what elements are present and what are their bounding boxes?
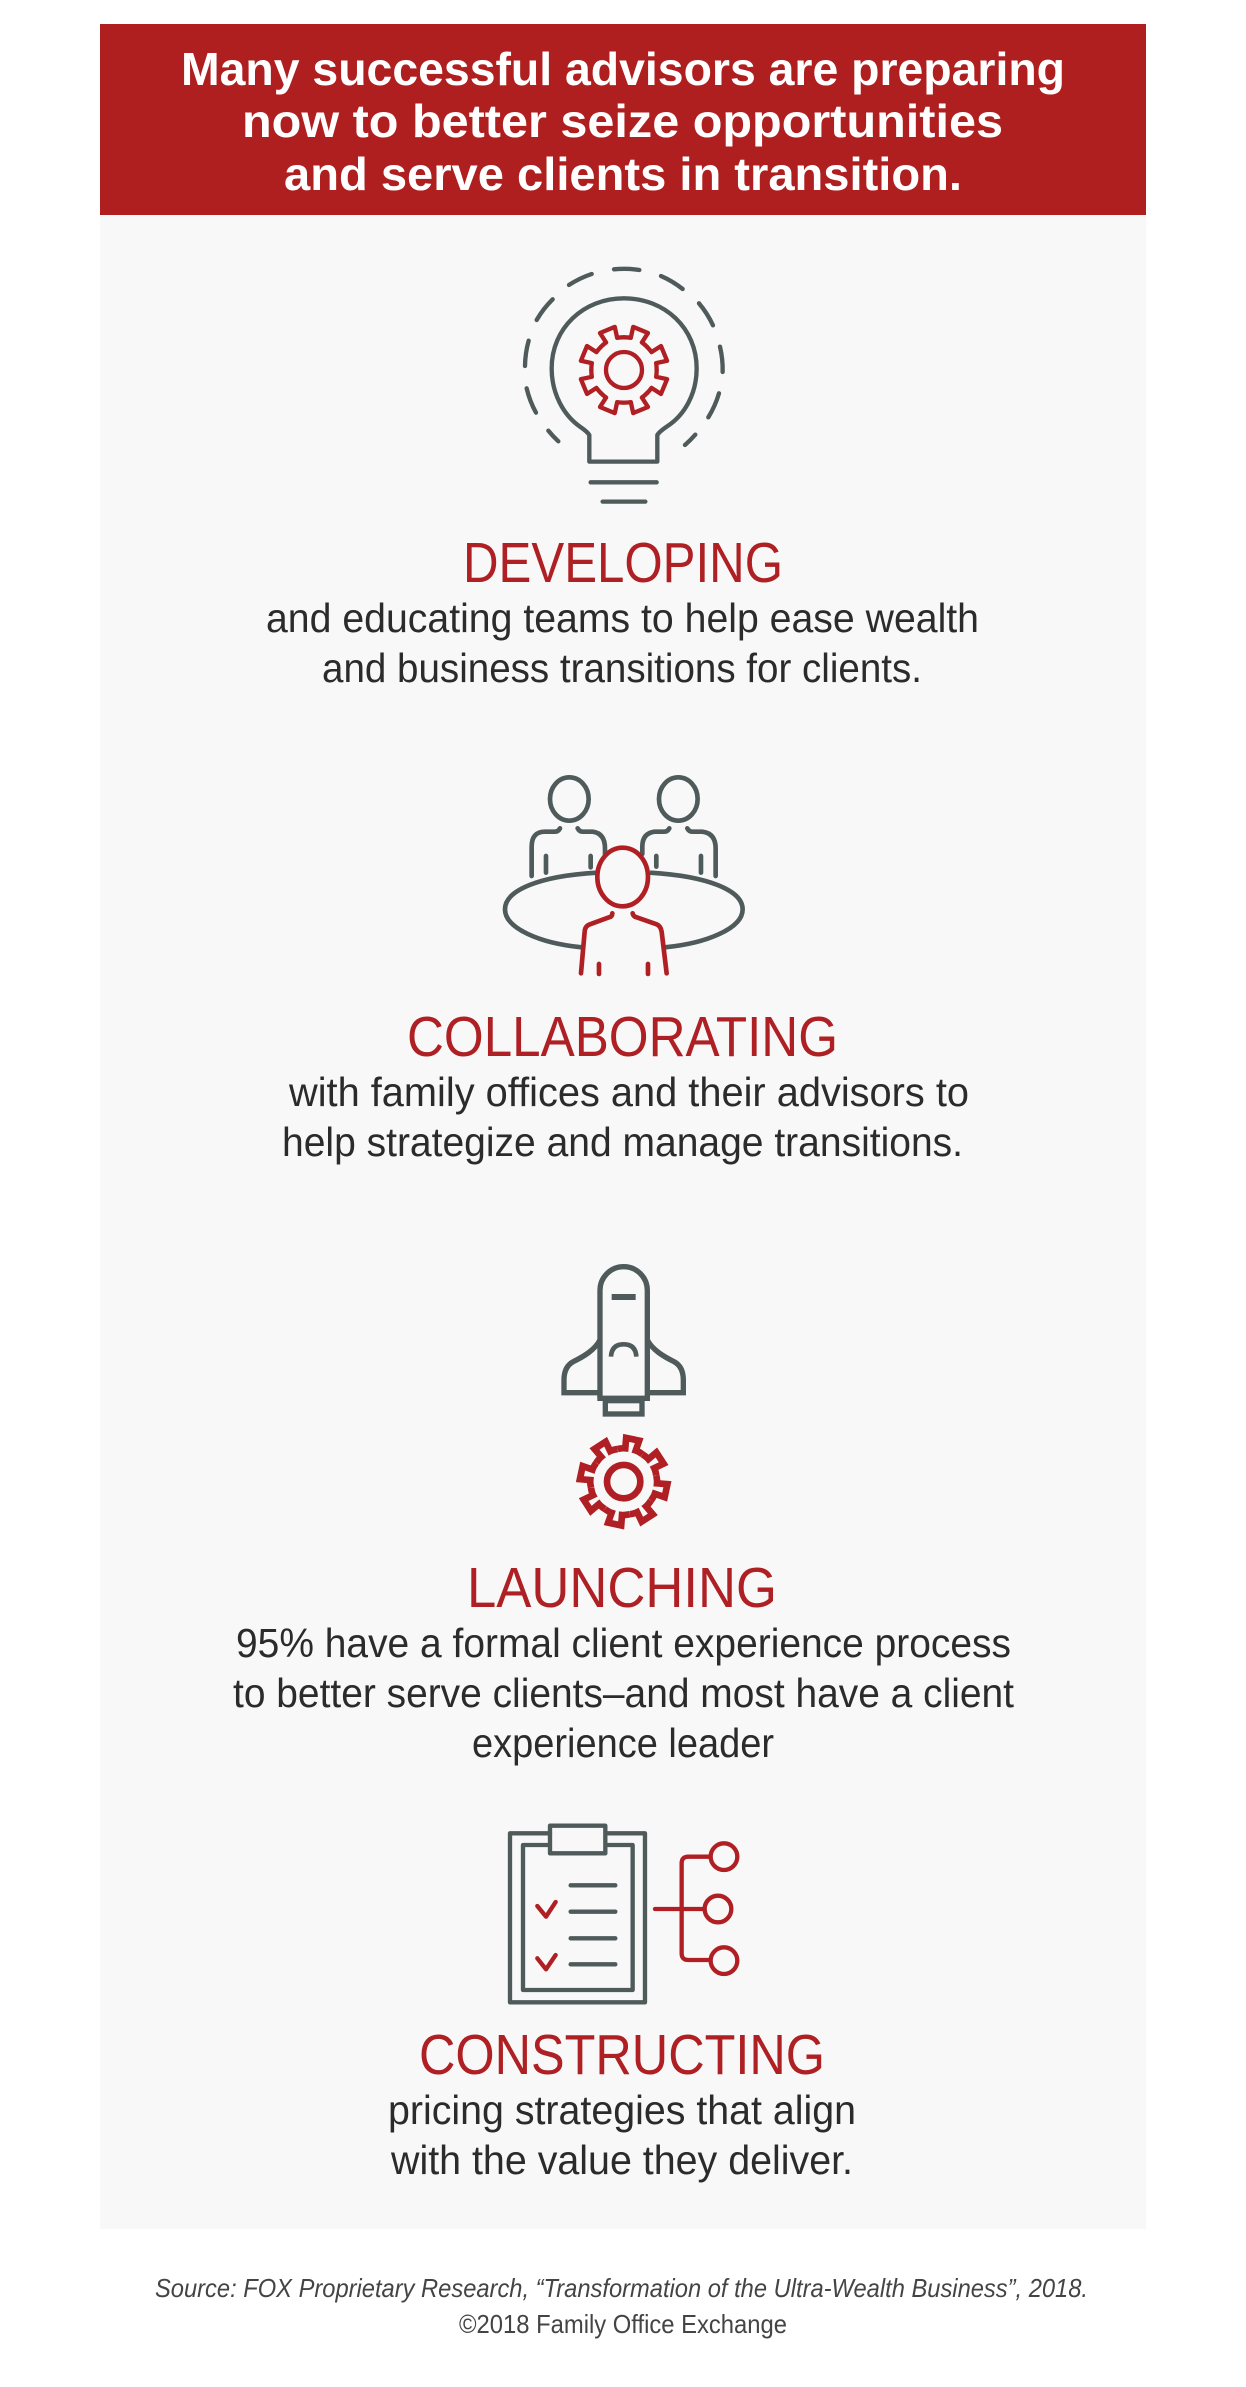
text: developing description: and business transitions for clients. xyxy=(322,645,922,691)
title text: and serve clients in transition. xyxy=(284,148,962,200)
panel: launching xyxy=(233,1267,1015,1766)
title text xyxy=(181,43,1065,200)
text: collaborating description: help strategize and manage transitions. xyxy=(282,1119,963,1165)
heading: launching: LAUNCHING xyxy=(467,1556,777,1620)
panel: constructing xyxy=(388,1826,856,2183)
title banner xyxy=(100,24,1146,215)
text: developing description: and educating teams to help ease wealth xyxy=(266,595,979,641)
text: constructing description: pricing strategies that align xyxy=(388,2087,856,2133)
heading: developing: DEVELOPING xyxy=(463,531,783,595)
icon: clipboard checklist with branching nodes xyxy=(510,1826,737,2002)
icon: rocket and gear xyxy=(564,1267,683,1527)
title text: Many successful advisors are preparing xyxy=(181,43,1065,95)
source and copyright footer: Source: FOX Proprietary Research, “Transformation of the Ultra-Wealth Business”, 2018. xyxy=(155,2273,1088,2303)
icon: lightbulb with gear xyxy=(525,269,723,502)
title text: now to better seize opportunities xyxy=(242,95,1003,147)
panel: collaborating xyxy=(282,777,969,1165)
heading: collaborating: COLLABORATING xyxy=(407,1005,838,1069)
text: launching description xyxy=(233,1620,1015,1766)
text: collaborating description xyxy=(282,1069,969,1165)
text: launching description: 95% have a formal client experience process xyxy=(236,1620,1011,1666)
heading: constructing: CONSTRUCTING xyxy=(419,2023,825,2087)
text: developing description xyxy=(266,595,979,691)
text: constructing description: with the value they deliver. xyxy=(390,2137,853,2183)
source and copyright footer: ©2018 Family Office Exchange xyxy=(459,2309,787,2339)
icon: three people around a table xyxy=(505,777,743,974)
panel: content background xyxy=(100,215,1146,2229)
text: constructing description xyxy=(388,2087,856,2183)
text: launching description: to better serve clients–and most have a client xyxy=(233,1670,1015,1716)
text: launching description: experience leader xyxy=(472,1720,774,1766)
source and copyright footer xyxy=(155,2273,1088,2339)
text: collaborating description: with family offices and their advisors to xyxy=(288,1069,969,1115)
panel: developing xyxy=(266,269,979,691)
